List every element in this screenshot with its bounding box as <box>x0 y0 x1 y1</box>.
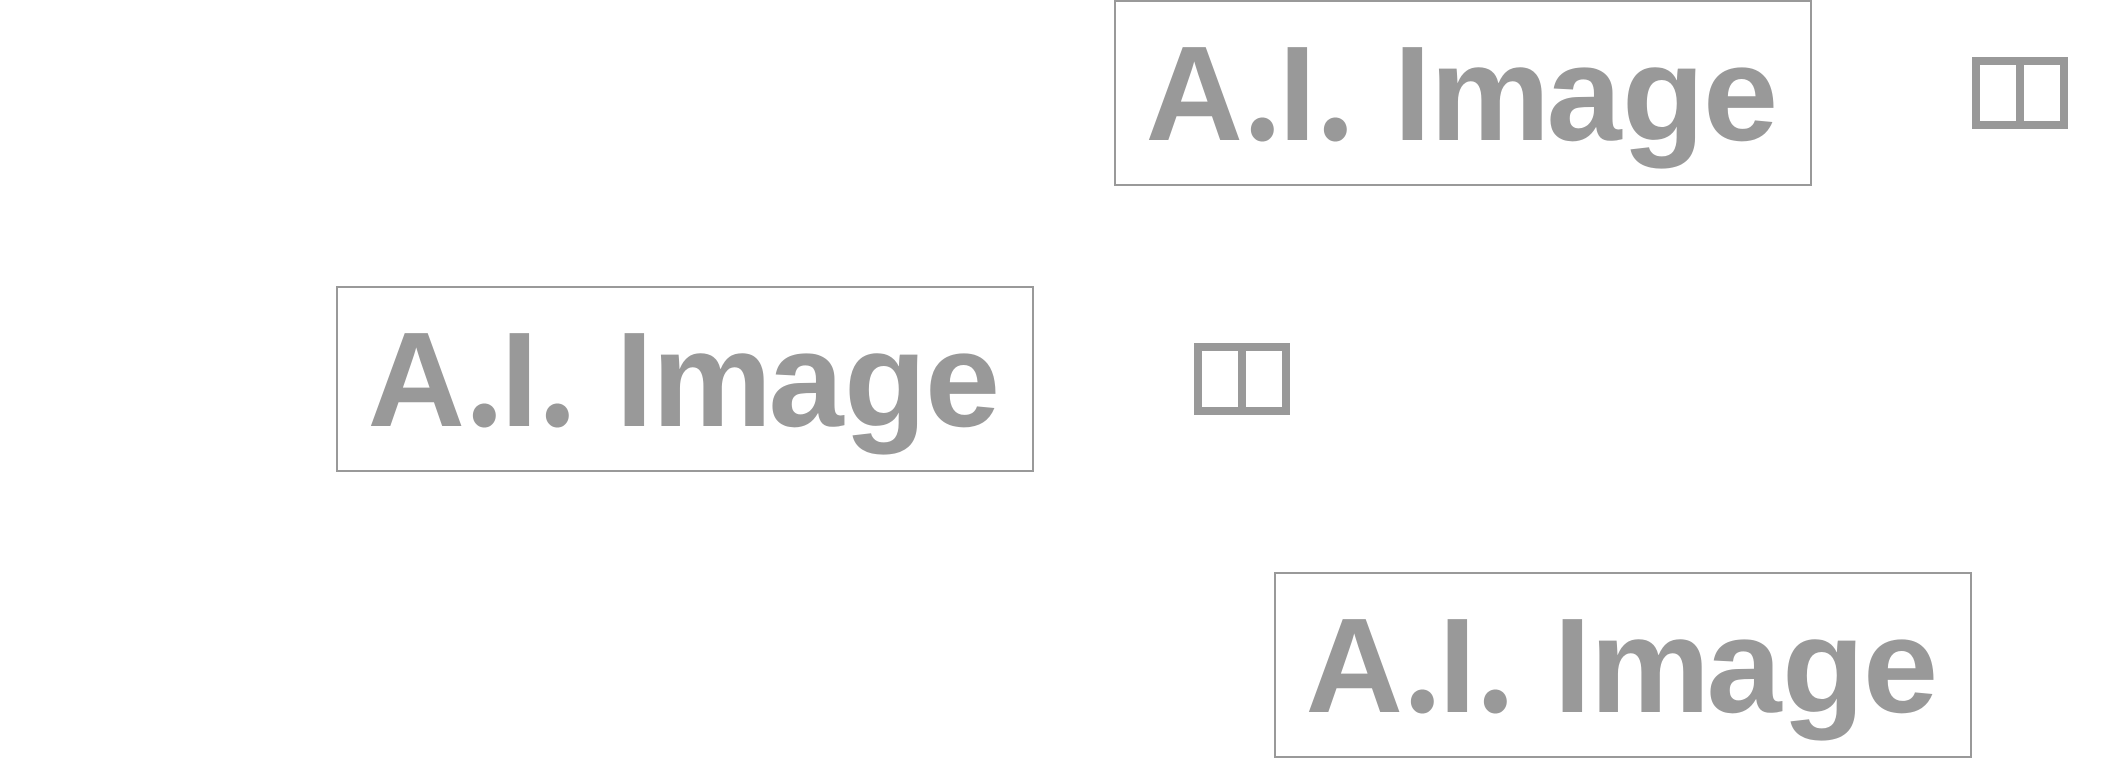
frame <box>1275 573 1971 757</box>
label: A.I. Image: . <box>1402 567 1443 748</box>
label: A.I. Image: m <box>652 304 772 455</box>
panel: middle image placeholder <box>337 281 1033 471</box>
label: A.I. Image: I <box>1439 590 1476 741</box>
label: A.I. Image: I <box>1279 18 1316 169</box>
label: A.I. Image: I <box>1394 18 1431 169</box>
label: A.I. Image: A <box>1146 18 1243 169</box>
label: A.I. Image: . <box>464 281 505 462</box>
frame <box>337 287 1033 471</box>
label: A.I. Image: . <box>1315 0 1356 176</box>
label: A.I. Image: m <box>1590 590 1710 741</box>
label: A.I. Image: . <box>1475 567 1516 748</box>
frame <box>1115 1 1811 185</box>
icon: missing glyph boxes, top <box>1972 57 2068 129</box>
label: A.I. Image: a <box>1706 590 1782 741</box>
label: A.I. Image: e <box>925 304 1000 455</box>
panel: bottom image placeholder <box>1275 567 1971 757</box>
label: A.I. Image: . <box>1242 0 1283 176</box>
label: A.I. Image: A <box>1306 590 1403 741</box>
label: A.I. Image: g <box>1782 590 1864 741</box>
panel: top image placeholder <box>1115 0 1811 185</box>
label: A.I. Image: A <box>368 304 465 455</box>
label: A.I. Image: a <box>1546 18 1622 169</box>
label: A.I. Image: I <box>616 304 653 455</box>
label: A.I. Image: a <box>768 304 844 455</box>
label: A.I. Image: e <box>1863 590 1938 741</box>
icon: missing glyph boxes, middle <box>1194 343 1290 415</box>
label: A.I. Image: I <box>501 304 538 455</box>
label: A.I. Image: g <box>844 304 926 455</box>
label: A.I. Image: I <box>1554 590 1591 741</box>
label: A.I. Image: g <box>1622 18 1704 169</box>
label: A.I. Image: e <box>1703 18 1778 169</box>
label: A.I. Image: m <box>1430 18 1550 169</box>
label: A.I. Image: . <box>537 281 578 462</box>
